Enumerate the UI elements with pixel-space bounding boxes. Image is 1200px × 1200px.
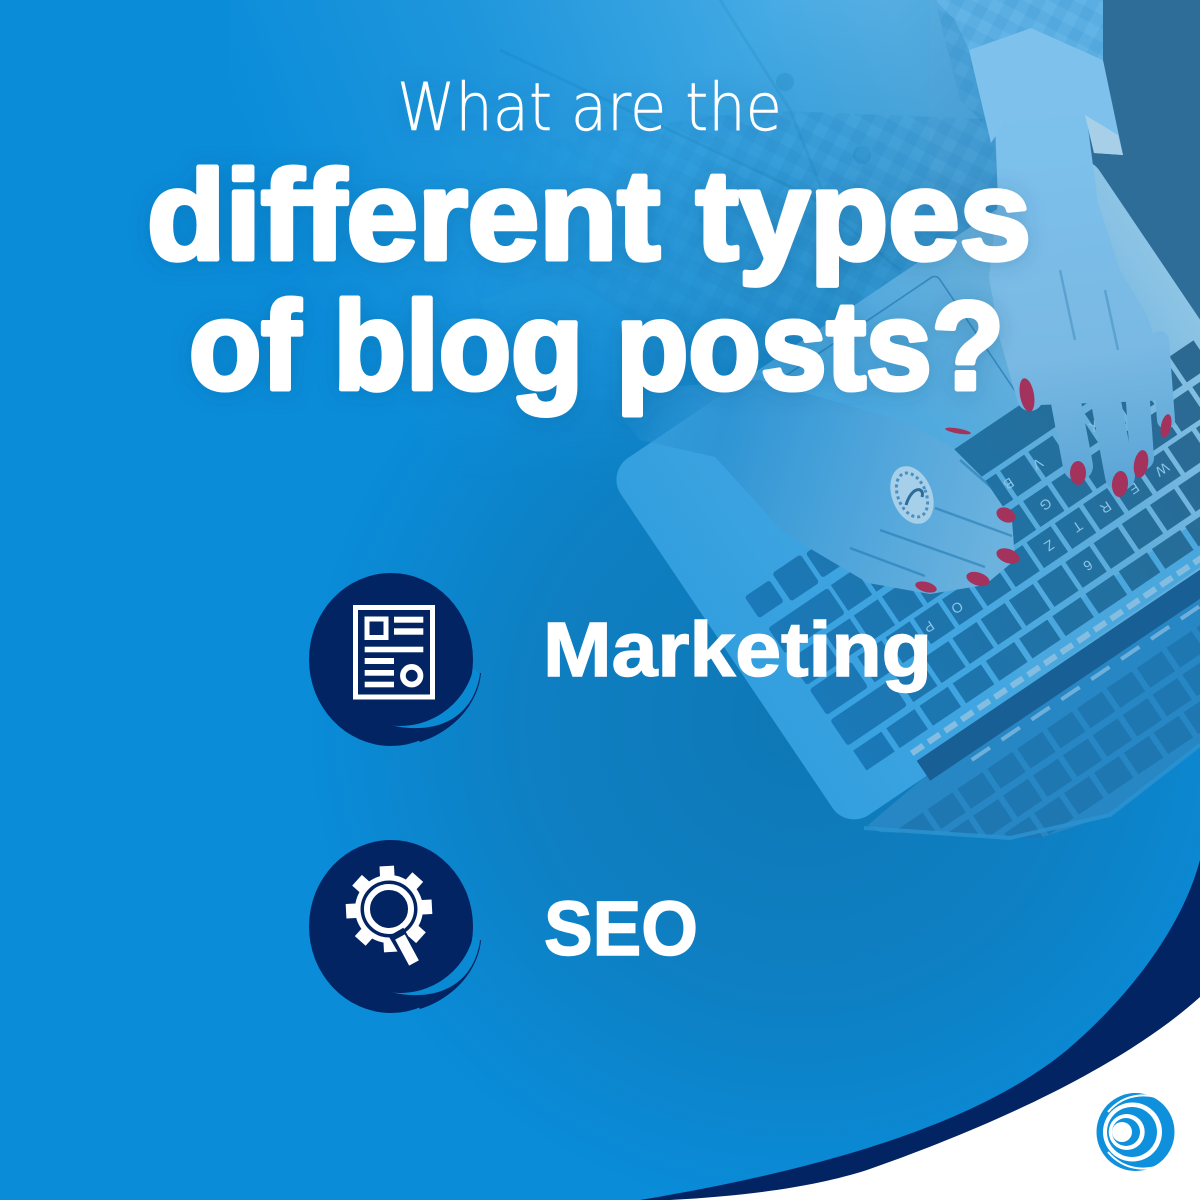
photo: right hand xyxy=(989,105,1174,498)
icon badge: newspaper article xyxy=(309,573,481,746)
hinge band xyxy=(917,313,1200,781)
ring xyxy=(882,460,942,530)
key legends: W xyxy=(1152,459,1172,480)
hinge dashes xyxy=(912,324,1200,753)
key legends: P xyxy=(921,618,937,636)
key legends: G xyxy=(1037,495,1055,514)
key legends: V xyxy=(1029,455,1046,474)
title line 3: of blog posts? xyxy=(189,277,1004,416)
title line 2: different types xyxy=(147,144,1031,286)
red nails xyxy=(914,426,1022,595)
key legends: B xyxy=(1000,474,1017,493)
white corner xyxy=(670,997,1200,1200)
icon badge: gear with magnifier xyxy=(309,840,481,1013)
item: marketing xyxy=(309,573,932,746)
photo: shirt xyxy=(290,0,1089,386)
key legends: O xyxy=(948,598,966,618)
navy swoosh corner xyxy=(640,860,1200,1200)
red nails xyxy=(1017,377,1173,498)
photo: carpet xyxy=(1090,0,1200,345)
keyboard keys xyxy=(742,337,1200,747)
laptop screen reflection xyxy=(868,599,1200,838)
trackpad outline xyxy=(752,274,1026,531)
item: seo xyxy=(309,840,698,1013)
key legends: R xyxy=(1097,498,1115,517)
title xyxy=(147,69,1031,416)
photo: laptop xyxy=(616,164,1200,840)
title line 1: What are the xyxy=(397,69,782,146)
laptop deck xyxy=(606,150,1200,830)
label: seo: SEO xyxy=(544,886,698,972)
laptop screen rim xyxy=(864,745,1200,838)
photo: left hand xyxy=(600,380,1022,595)
key legends: T xyxy=(1069,518,1086,536)
photo: sleeve and cuff xyxy=(935,0,1123,155)
key legends: E xyxy=(1126,479,1142,498)
logo xyxy=(1096,1093,1174,1171)
key legends: 6 xyxy=(1080,557,1096,574)
key legends: X xyxy=(1085,417,1103,436)
label: marketing: Marketing xyxy=(543,607,932,693)
key legends xyxy=(879,398,1194,668)
key legends: Z xyxy=(1041,537,1057,555)
